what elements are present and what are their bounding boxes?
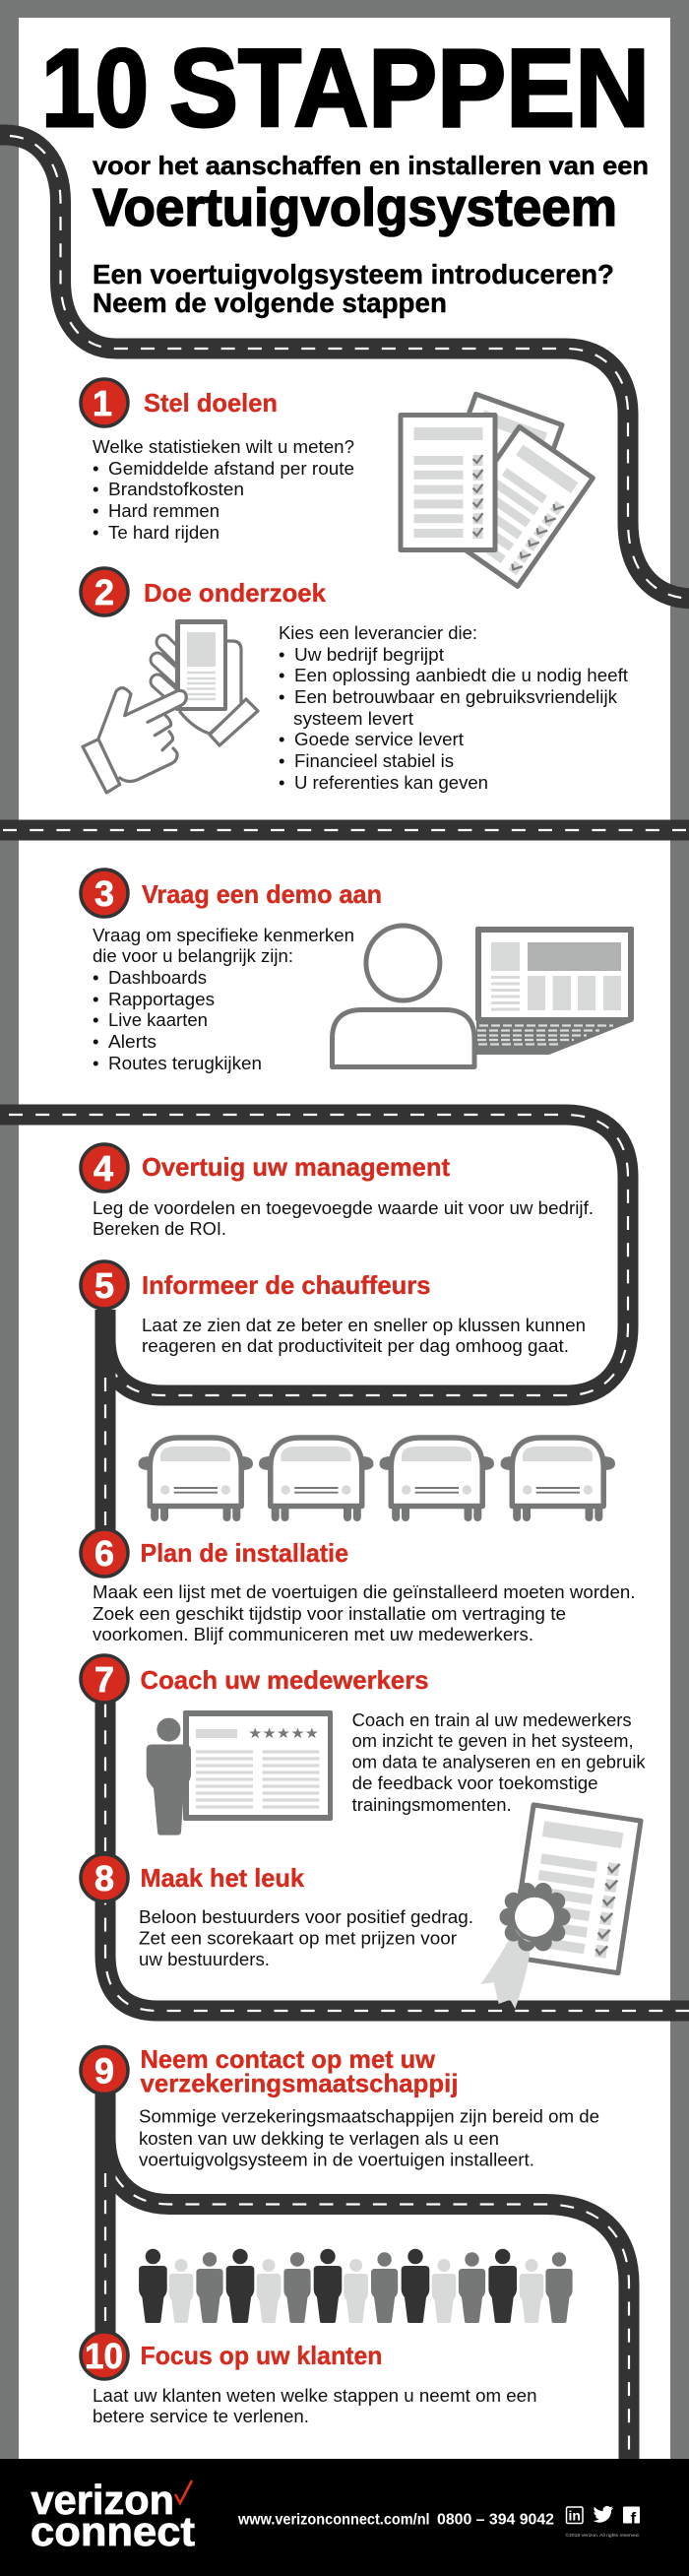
website and phone: www.verizonconnect.com/nl xyxy=(237,2511,430,2529)
body text 3: • xyxy=(93,989,98,1009)
body text 2: Goede service levert xyxy=(294,729,464,749)
panel: step 4 xyxy=(81,1144,594,1239)
badge 4 xyxy=(81,1144,128,1191)
heading 3: Vraag een demo aan xyxy=(142,879,382,909)
heading 9: verzekeringsmaatschappij xyxy=(140,2068,459,2097)
body text 8: Zet een scorekaart op met prijzen voor xyxy=(139,1928,457,1948)
body text 10 xyxy=(93,2385,537,2426)
heading 5: Informeer de chauffeurs xyxy=(142,1270,431,1300)
body text 5: reageren en dat productiviteit per dag omhoog gaat. xyxy=(142,1335,569,1356)
website and phone: 0800 – 394 9042 xyxy=(437,2511,554,2529)
body text 1: Te hard rijden xyxy=(108,522,219,543)
body text 4: Leg de voordelen en toegevoegde waarde uit voor uw bedrijf. xyxy=(93,1197,594,1218)
body text 2: • xyxy=(279,644,284,665)
badge 10: 10 xyxy=(85,2336,123,2376)
body text 9: Sommige verzekeringsmaatschappijen zijn bereid om de xyxy=(139,2106,599,2127)
title: 10 xyxy=(41,27,149,150)
badge 9 xyxy=(81,2046,128,2093)
body text 1: Welke statistieken wilt u meten? xyxy=(93,436,354,457)
body text 2: • xyxy=(279,750,284,771)
badge 3 xyxy=(81,869,128,917)
body text 8: Beloon bestuurders voor positief gedrag. xyxy=(139,1906,473,1927)
panel: step 6 xyxy=(81,1529,636,1644)
body text 1: • xyxy=(93,500,98,521)
badge 3: 3 xyxy=(94,873,114,914)
body text 6: Zoek een geschikt tijdstip voor installatie om vertraging te xyxy=(93,1603,566,1624)
subtitle line: voor het aanschaffen en installeren van een xyxy=(93,151,649,180)
badge 7: 7 xyxy=(94,1659,114,1700)
logo xyxy=(31,2477,195,2554)
heading 4: Overtuig uw management xyxy=(142,1152,450,1182)
panel: step 10 xyxy=(81,2332,537,2426)
icon: twitter xyxy=(593,2506,613,2523)
icon: hands with phone xyxy=(83,619,258,793)
body text 7 xyxy=(352,1709,646,1815)
body text 6 xyxy=(93,1581,636,1644)
heading 7: Coach uw medewerkers xyxy=(140,1665,429,1695)
body text 3: Vraag om specifieke kenmerken xyxy=(93,925,354,945)
panel: step 8 xyxy=(81,1805,641,2009)
icon: laptop xyxy=(475,927,634,1055)
body text 3: Routes terugkijken xyxy=(108,1053,262,1073)
body text 1: Hard remmen xyxy=(108,500,219,521)
badge 6: 6 xyxy=(94,1533,114,1574)
body text 1: • xyxy=(93,522,98,543)
icon: facebook xyxy=(623,2507,640,2528)
body text 2: Financieel stabiel is xyxy=(294,750,454,771)
body text 2: Een betrouwbaar en gebruiksvriendelijk xyxy=(294,686,618,707)
road: step 9 branch to footer xyxy=(105,2071,629,2462)
icon: coach at scoreboard xyxy=(147,1710,333,1835)
road: step 5 to step 6 xyxy=(94,1310,116,1556)
body text 7: Coach en train al uw medewerkers xyxy=(352,1709,632,1730)
body text 3: • xyxy=(93,967,98,988)
road: step 9 to step 10 xyxy=(94,2071,116,2358)
body text 1: Brandstofkosten xyxy=(108,479,244,499)
product title: Voertuigvolgsysteem xyxy=(93,178,617,237)
heading 8: Maak het leuk xyxy=(140,1863,305,1893)
badge 4: 4 xyxy=(94,1148,113,1189)
header xyxy=(41,27,650,318)
badge 2: 2 xyxy=(94,572,114,612)
body text 7: de feedback voor toekomstige xyxy=(352,1772,598,1793)
body text 5: Laat ze zien dat ze beter en sneller op klussen kunnen xyxy=(142,1315,586,1335)
road: top winding road xyxy=(0,135,689,599)
body text 10: Laat uw klanten weten welke stappen u neemt om een xyxy=(93,2385,537,2406)
heading 2: Doe onderzoek xyxy=(144,578,327,608)
panel: step 3 xyxy=(81,869,634,1073)
body text 2: Uw bedrijf begrijpt xyxy=(294,644,444,665)
body text 2: Kies een leverancier die: xyxy=(279,622,477,643)
road: step 7 to step 8 and across xyxy=(105,1679,689,2011)
badge 2 xyxy=(81,568,128,615)
icon: coach at scoreboard: ★★★★★ xyxy=(248,1726,319,1742)
body text 2 xyxy=(279,622,628,793)
body text 2: • xyxy=(279,729,284,749)
badge 8 xyxy=(81,1854,128,1901)
body text 2: Een oplossing aanbiedt die u nodig heeft xyxy=(294,665,628,685)
heading 9: Neem contact op met uw xyxy=(140,2044,436,2074)
copyright: ©2018 Verizon. All rights reserved. xyxy=(565,2532,640,2539)
logo: verizon xyxy=(31,2477,174,2523)
badge 6 xyxy=(81,1529,128,1577)
body text 3: • xyxy=(93,1009,98,1030)
body text 10: betere service te verlenen. xyxy=(93,2406,309,2426)
panel: step 2 xyxy=(81,568,628,793)
body text 3: • xyxy=(93,1053,98,1073)
icon: row of four vehicles xyxy=(138,1438,615,1517)
body text 4: Bereken de ROI. xyxy=(93,1218,226,1239)
body text 9: kosten van uw dekking te verlagen als u een xyxy=(139,2128,499,2149)
body text 6: voorkomen. Blijf communiceren met uw medewerkers. xyxy=(93,1624,533,1644)
body text 4 xyxy=(93,1197,594,1239)
body text 5 xyxy=(142,1315,586,1356)
heading 6: Plan de installatie xyxy=(140,1538,348,1568)
road: straight crossing xyxy=(0,819,689,841)
body text 3: Rapportages xyxy=(108,989,215,1009)
logo: connect xyxy=(31,2508,195,2554)
panel: step 5 xyxy=(81,1261,586,1356)
panel: step 9 xyxy=(81,2044,599,2169)
heading 1: Stel doelen xyxy=(144,388,278,418)
icon: person xyxy=(333,926,474,1067)
body text 3: • xyxy=(93,1031,98,1052)
badge 8: 8 xyxy=(94,1858,114,1899)
body text 6: Maak een lijst met de voertuigen die geïnstalleerd moeten worden. xyxy=(93,1581,636,1602)
icon: row of people xyxy=(139,2249,573,2323)
body text 1 xyxy=(93,436,354,543)
badge 9: 9 xyxy=(94,2050,114,2092)
heading 9 xyxy=(140,2044,459,2097)
badge 7 xyxy=(81,1655,128,1703)
body text 8 xyxy=(139,1906,473,1969)
body text 3: die voor u belangrijk zijn: xyxy=(93,945,293,966)
badge 1: 1 xyxy=(93,383,112,423)
title: STAPPEN xyxy=(169,27,650,150)
body text 8: uw bestuurders. xyxy=(139,1949,270,1969)
body text 9: voertuigvolgsysteem in de voertuigen installeert. xyxy=(139,2149,534,2169)
body text 1: Gemiddelde afstand per route xyxy=(108,458,354,479)
road: loop around steps 4 and 5 xyxy=(0,1115,628,1395)
panel: step 7 xyxy=(81,1655,646,1835)
body text 7: trainingsmomenten. xyxy=(352,1794,512,1815)
website and phone xyxy=(237,2511,554,2529)
icon: certificate with ribbon xyxy=(480,1805,641,2009)
heading 10: Focus op uw klanten xyxy=(140,2341,382,2370)
badge 5 xyxy=(81,1261,128,1309)
body text 3 xyxy=(93,925,354,1073)
badge 5: 5 xyxy=(94,1265,114,1306)
footer xyxy=(0,2459,689,2576)
panel: step 1 xyxy=(81,379,593,586)
intro line 2: Neem de volgende stappen xyxy=(93,288,447,318)
body text 3: Live kaarten xyxy=(108,1009,208,1030)
body text 1: • xyxy=(93,479,98,499)
body text 1: • xyxy=(93,458,98,479)
body text 2: systeem levert xyxy=(293,708,413,729)
body text 3: Alerts xyxy=(108,1031,157,1052)
body text 7: om data te analyseren en en gebruik xyxy=(352,1751,646,1772)
badge 1 xyxy=(81,379,128,426)
body text 3: Dashboards xyxy=(108,967,207,988)
body text 9 xyxy=(139,2106,599,2169)
body text 2: • xyxy=(279,686,284,707)
body text 2: • xyxy=(279,772,284,793)
icon: checklist papers xyxy=(401,394,593,586)
body text 2: U referenties kan geven xyxy=(294,772,488,793)
body text 7: om inzicht te geven in het systeem, xyxy=(352,1730,634,1751)
icon: facebook: f xyxy=(630,2509,636,2528)
body text 2: • xyxy=(279,665,284,685)
icon: linkedin: in xyxy=(569,2507,581,2523)
intro line 1: Een voertuigvolgsysteem introduceren? xyxy=(93,259,614,290)
